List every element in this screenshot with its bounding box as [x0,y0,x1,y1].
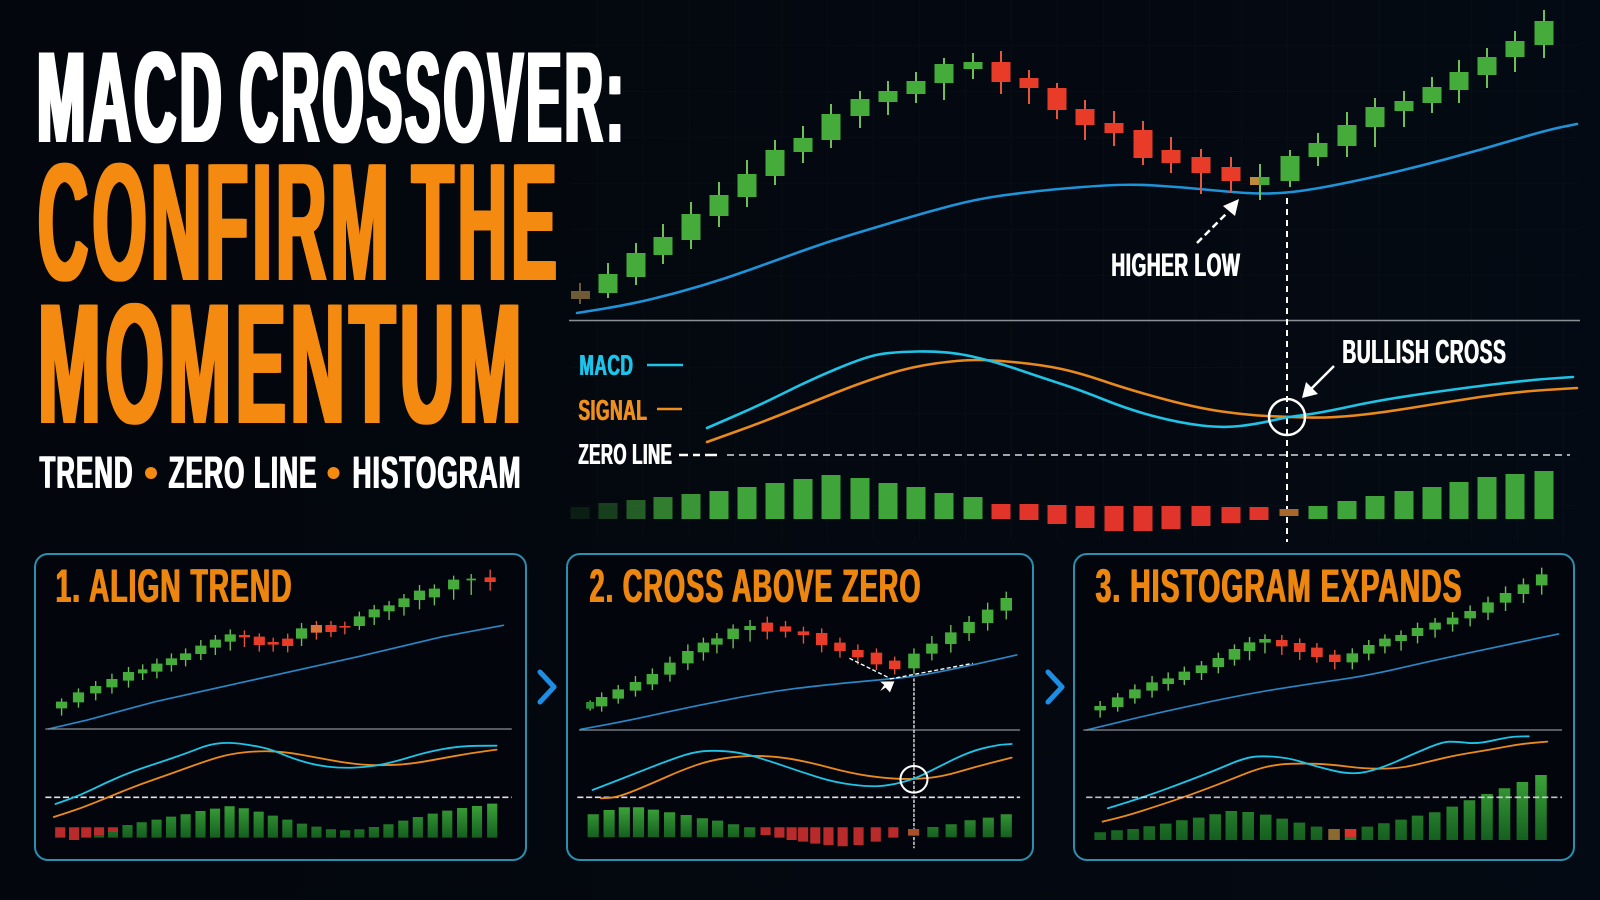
transition candles [571,177,1259,304]
green bars [580,471,1544,519]
divider line [569,320,1580,322]
trend line [577,124,1577,313]
panel: 1. align trend [35,554,526,860]
panel: 2. cross above zero [567,554,1033,860]
subtitle: ZERO LINE [168,447,317,498]
arrow: step 2 to 3 [1048,672,1062,702]
mini histogram [593,807,1006,846]
higher low markers [849,658,973,692]
title line: Confirm the: CONFIRM [36,128,391,316]
mini charts [45,570,512,840]
mini signal and MACD lines [593,744,1012,798]
mini candles [62,570,490,716]
red candles [1001,51,1231,194]
bullish cross circle [1269,399,1305,435]
mini candles [590,592,1006,712]
mini zero line [45,795,512,800]
mini zero line [577,795,1020,800]
MACD chart [707,351,1577,455]
title line: Confirm the [36,128,559,316]
callout: higher low [1111,199,1240,283]
red bars [1001,504,1259,531]
mini histogram [60,804,492,840]
panel heading: 2. CROSS ABOVE ZERO [589,559,921,612]
green candles [608,10,1544,298]
title [35,24,625,460]
title: THE [410,128,559,316]
mini vertical marker [912,678,916,848]
main price chart [571,10,1577,313]
MACD line [707,351,1573,428]
arrow: step 1 to 2 [540,672,554,702]
mini candles [1100,568,1542,718]
subtitle [39,447,521,498]
mini trend line [49,625,503,729]
panel heading: 1. ALIGN TREND [55,559,292,612]
transition bar [1280,509,1298,516]
mini trend line [581,655,1017,729]
title line: MACD Crossover: MACD [35,24,223,170]
mini histogram [1100,775,1541,840]
mini cross circle [900,766,927,793]
MACD legend [578,350,717,471]
mini charts [577,592,1020,848]
text: CROSSOVER: [238,24,625,170]
zero line [727,454,1570,456]
main histogram [580,471,1544,531]
title: MOMENTUM [36,268,524,460]
MACD legend: MACD [579,350,633,382]
mini zero line [1086,795,1562,800]
MACD legend: ZERO LINE [578,439,672,471]
mini signal and MACD lines [54,743,497,817]
signal line [707,360,1577,442]
MACD legend: SIGNAL [578,395,647,427]
subtitle: HISTOGRAM [352,447,521,498]
callout: higher low: HIGHER LOW [1111,247,1240,283]
panel: 3. histogram expands [1074,554,1574,860]
mini trend line [1087,634,1559,730]
subtitle: TREND [39,447,133,498]
callout: bullish cross [1302,333,1506,398]
vertical cross marker [1286,198,1288,542]
mini charts [1083,568,1562,840]
mini signal and MACD lines [1103,736,1547,822]
